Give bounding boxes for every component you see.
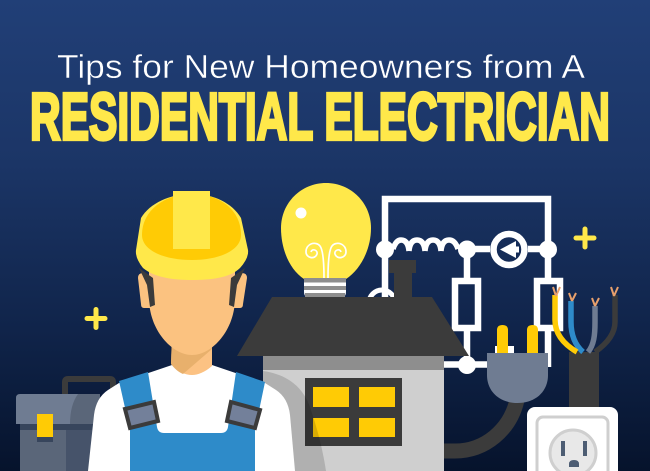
hard hat (136, 191, 248, 280)
icon: right sparkle plus (576, 229, 594, 247)
blue overalls (119, 372, 265, 471)
power cord (444, 400, 517, 451)
left strap buckle (125, 402, 158, 428)
neck (171, 335, 212, 375)
right strap buckle (227, 402, 260, 428)
icon: toolbox (16, 379, 113, 471)
electrical circuit diagram (369, 199, 560, 374)
ears (138, 273, 150, 308)
helmet straps (139, 268, 155, 307)
roof (237, 297, 469, 356)
lightbulb (281, 183, 371, 297)
house (237, 260, 469, 471)
title: first line: Tips for New Homeowners from A (57, 48, 585, 85)
icon: left sparkle plus (87, 310, 105, 328)
face (149, 268, 235, 355)
shirt (88, 365, 295, 471)
chimney (389, 260, 416, 300)
stripped cable (553, 287, 618, 408)
plug (487, 325, 548, 403)
window (305, 378, 402, 446)
house wall (263, 356, 444, 471)
electrician figure (88, 191, 295, 471)
wall outlet (527, 407, 618, 471)
